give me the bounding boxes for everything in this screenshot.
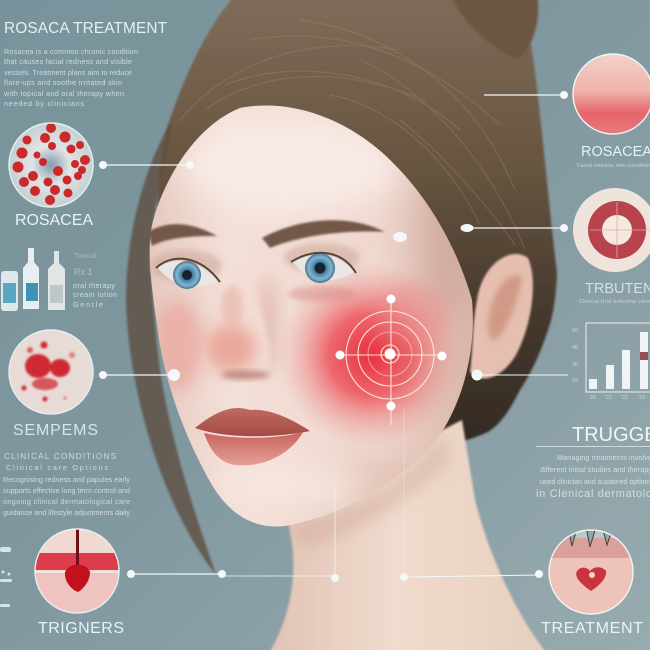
- connector: rosacea microbe: [100, 162, 194, 168]
- text block: clinical dermatology: [536, 446, 650, 500]
- icon: symptoms skin sample: [9, 330, 93, 414]
- ear: [470, 254, 533, 378]
- label: Rosacea right: ROSACEA: [581, 144, 650, 160]
- text block: intro: flare-ups and soothe irritated skin: [4, 78, 122, 87]
- connector: tributen right: [461, 224, 568, 232]
- text block: clinical conditions: guidance and lifestyle adjustments daily: [3, 508, 130, 517]
- loose strands left: [126, 120, 216, 575]
- connector: rosacea right: [484, 92, 568, 98]
- label: Trigners: TRIGNERS: [38, 620, 124, 637]
- text block: product notes: [73, 251, 117, 309]
- text block: product notes: Topical: [74, 251, 97, 260]
- bar chart: 15: [572, 378, 578, 384]
- bar chart: '21: [605, 395, 612, 401]
- icon ring: skin cross section: [35, 529, 119, 613]
- text block: product notes: Rx 1: [74, 267, 93, 277]
- right eyebrow: [262, 220, 385, 248]
- text block: clinical conditions: supports effective long term control and: [3, 486, 130, 495]
- label: Sempems: SEMPEMS: [13, 422, 98, 439]
- text block: product notes: Gentle: [73, 300, 103, 309]
- text block: intro: needed by clinicians: [4, 99, 84, 108]
- heading: Rosaca Treatment: ROSACA TREATMENT: [4, 20, 168, 37]
- face skin: [150, 105, 473, 527]
- caption: tributen: Clinical trial outcome care: [579, 299, 650, 305]
- text block: clinical dermatology: Managing treatments involve: [557, 453, 650, 462]
- hair bun: [450, 0, 538, 60]
- hair back mass: [158, 0, 557, 442]
- icon: treatment skin with heart: [550, 530, 632, 614]
- caption: rosacea right: Facial redness skin condition: [577, 163, 650, 169]
- icon ring: treatment: [549, 530, 633, 614]
- connector: tributen: [393, 232, 407, 242]
- bar chart: 30: [572, 362, 578, 368]
- text block: intro: vessels. Treatment plans aim to reduce: [4, 68, 132, 77]
- text block: product notes: cream lotion: [73, 290, 117, 299]
- neck shadow: [290, 430, 450, 548]
- icon: rosacea skin close-up: [574, 54, 650, 134]
- bar chart: 45: [572, 345, 578, 351]
- text block: intro: Rosacea is a common chronic condition: [4, 47, 138, 56]
- text block: clinical dermatology: used clinician and sustained options: [540, 477, 650, 486]
- icon: treatment target disc: [573, 188, 650, 272]
- bar chart: 60: [572, 328, 578, 334]
- text block: intro: with topical and oral therapy when: [3, 89, 124, 98]
- connector: symptoms: [100, 370, 180, 380]
- icon ring: rosacea microbe: [9, 123, 93, 207]
- left eyebrow: [148, 224, 217, 246]
- left eye: [150, 250, 222, 289]
- connector: triggers: [128, 570, 226, 578]
- icon ring: symptoms: [9, 330, 93, 414]
- inner ear: [488, 275, 522, 340]
- bar chart: '20: [589, 395, 596, 401]
- text block: clinical conditions: [3, 452, 130, 517]
- text block: intro: that causes facial redness and visible: [4, 57, 132, 66]
- text block: clinical conditions: ongoing clinical dermatological care: [3, 497, 130, 506]
- bar chart: [572, 323, 650, 401]
- right eye: [284, 243, 360, 302]
- text block: clinical dermatology: different initial studies and therapy: [540, 465, 650, 474]
- text block: clinical dermatology: in Clenical dermatolo: [536, 488, 650, 500]
- label: Rosacea left: ROSACEA: [15, 212, 93, 229]
- label: Treatment: TREATMENT: [541, 620, 643, 637]
- icon: rosacea microbe: [9, 123, 93, 207]
- text block: clinical conditions: CLINICAL CONDITIONS: [4, 452, 116, 461]
- icon: cut-off device at left edge: [0, 547, 12, 607]
- icon: skin cross section: [35, 527, 119, 613]
- bar chart: '22: [621, 395, 628, 401]
- text block: intro: [3, 47, 138, 108]
- hair strand highlights: [180, 20, 525, 250]
- icon ring: rosacea skin close-up: [573, 54, 650, 134]
- neck and shoulder: [268, 420, 548, 650]
- connector: treatment: [400, 410, 542, 580]
- target on cheek: [336, 294, 446, 425]
- lips: [195, 408, 310, 465]
- text block: clinical conditions: Recognising redness and papules early: [3, 475, 130, 484]
- connector: ear marker: [472, 370, 568, 380]
- portrait of woman: [126, 0, 557, 650]
- nose: [204, 262, 270, 380]
- icon: product bottles: [1, 248, 65, 311]
- facial shading and blush: [154, 115, 480, 520]
- text block: clinical conditions: Clinical care Options: [6, 463, 108, 472]
- bar chart: '23: [638, 395, 645, 401]
- connector: vertical neck line: [221, 490, 338, 582]
- text block: product notes: oral therapy: [73, 281, 115, 290]
